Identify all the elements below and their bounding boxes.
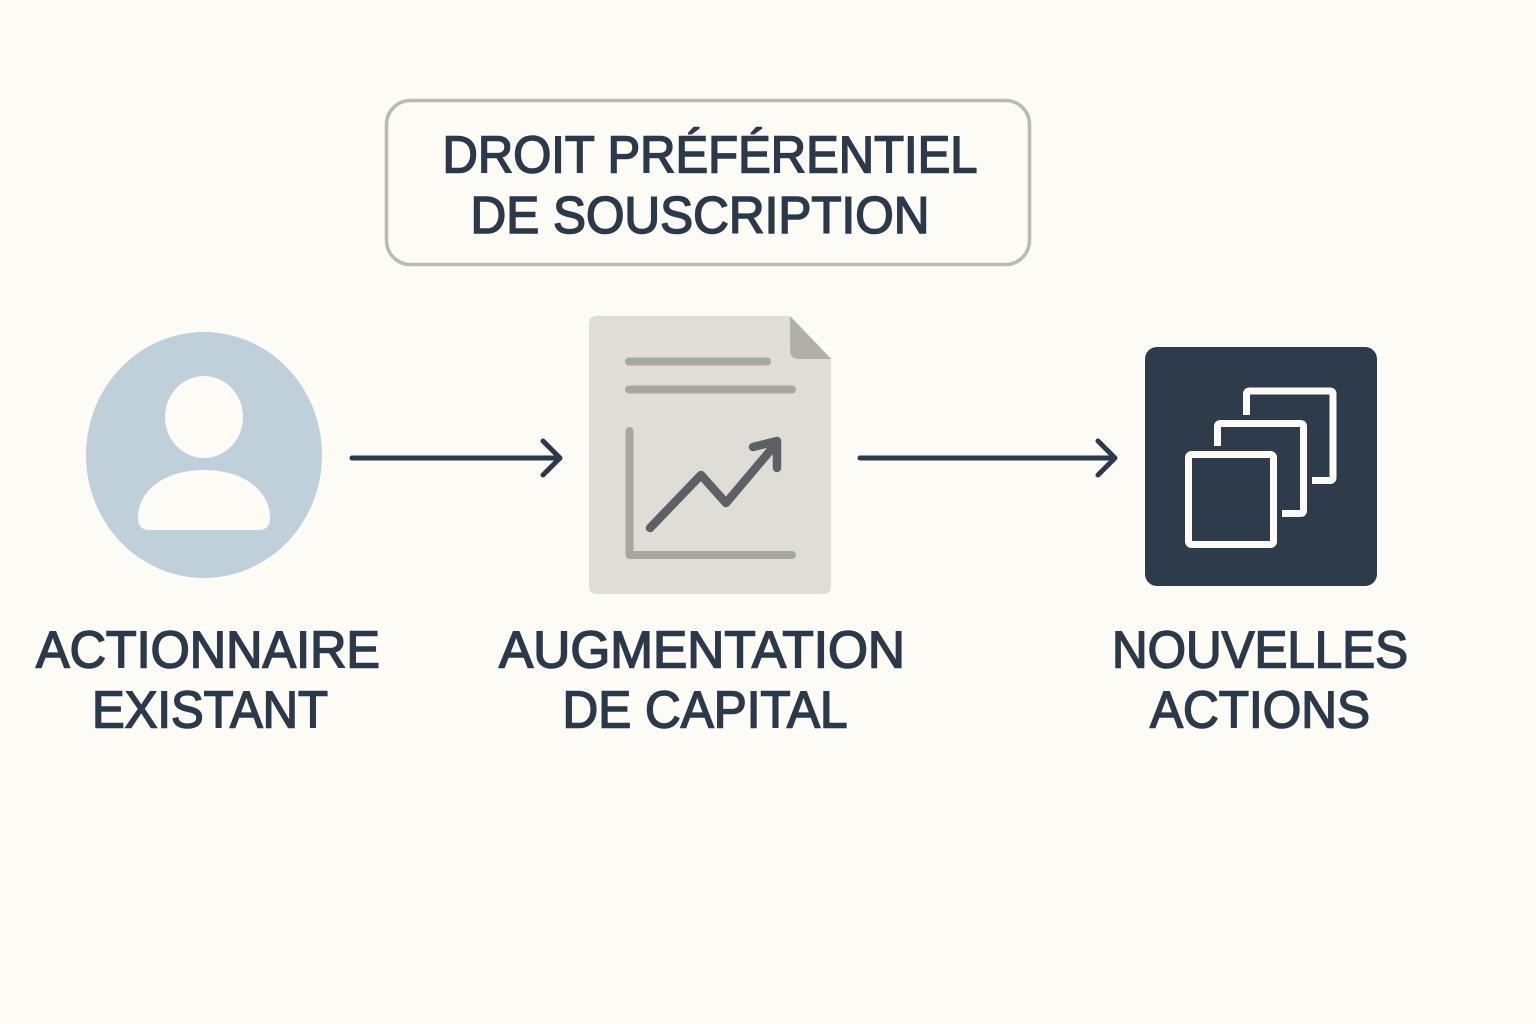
label: capital increase: AUGMENTATION xyxy=(499,622,905,680)
title box: DROIT PRÉFÉRENTIEL xyxy=(442,126,978,184)
label: new shares: ACTIONS xyxy=(1150,682,1370,740)
icon: shareholder xyxy=(86,332,322,578)
title box: DE SOUSCRIPTION xyxy=(470,187,930,245)
label: new shares: NOUVELLES xyxy=(1112,622,1408,680)
label: capital increase xyxy=(499,622,905,740)
title box xyxy=(386,100,1030,264)
icon: document with chart xyxy=(589,316,831,594)
label: existing shareholder: ACTIONNAIRE xyxy=(36,622,380,680)
label: existing shareholder: EXISTANT xyxy=(92,682,328,740)
label: new shares xyxy=(1112,622,1408,740)
label: capital increase: DE CAPITAL xyxy=(562,682,848,740)
label: existing shareholder xyxy=(36,622,380,740)
arrow: shareholder to capital increase xyxy=(352,441,560,475)
icon: new shares xyxy=(1145,347,1377,586)
arrow: capital increase to new shares xyxy=(860,441,1115,475)
